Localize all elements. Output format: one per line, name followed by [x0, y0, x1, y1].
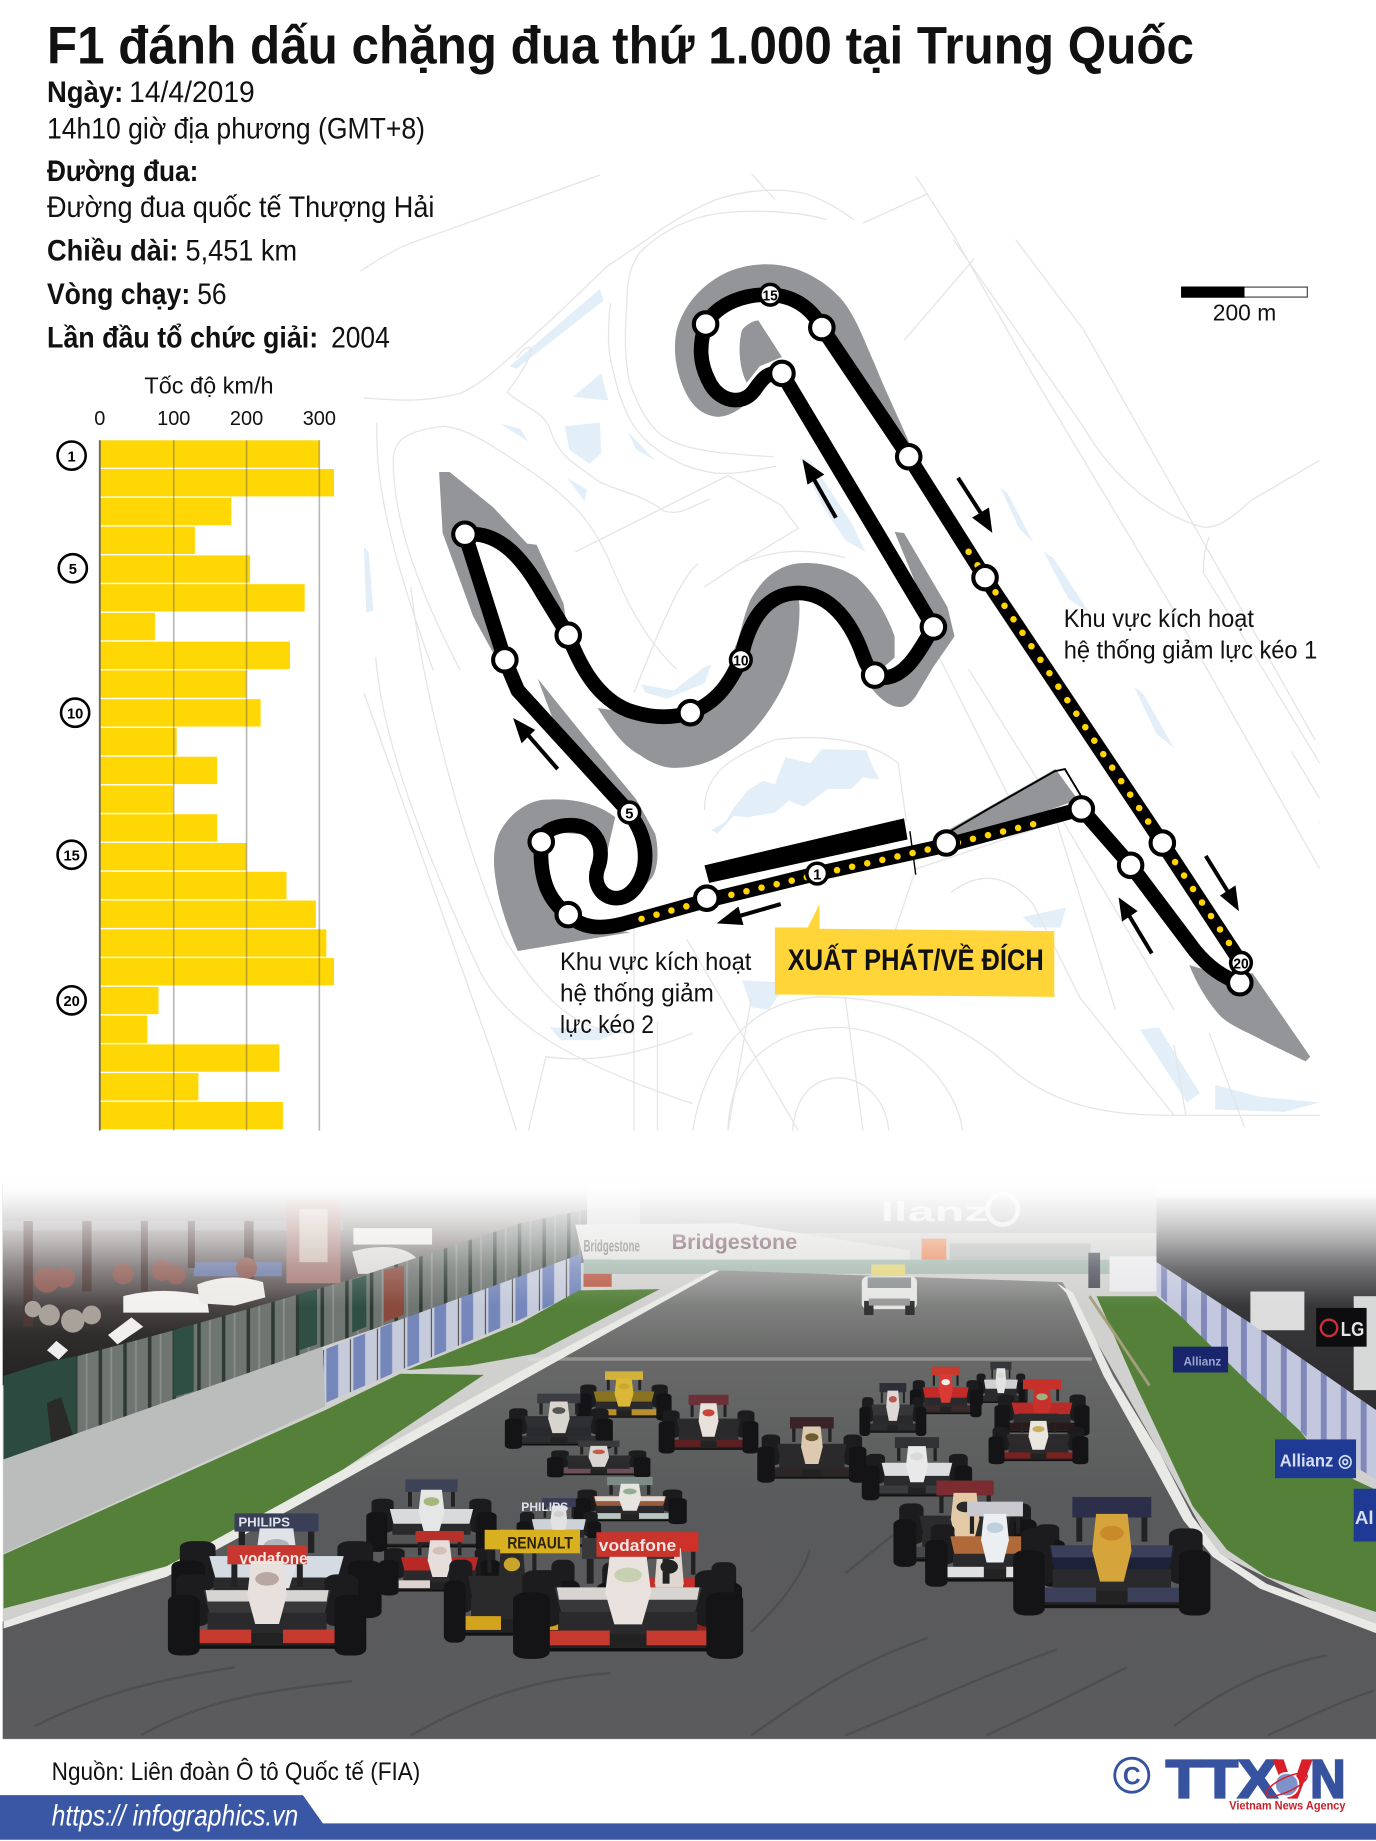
footer ribbon	[0, 1795, 1376, 1840]
skid marks	[35, 1526, 1374, 1735]
text block: race facts	[47, 76, 434, 355]
circuit track	[465, 295, 1241, 983]
corner markers: 15	[63, 849, 80, 865]
text block: race facts: Đường đua quốc tế Thượng Hải	[47, 191, 434, 224]
corner markers: 10	[67, 707, 83, 723]
left fence	[4, 1209, 587, 1459]
chart title: Tốc độ km/h	[144, 372, 274, 398]
footer ribbon: https:// infographics.vn	[52, 1800, 298, 1833]
track white lines	[4, 1270, 1376, 1633]
background signage: Bridgestone	[672, 1231, 797, 1254]
text block: race facts: Đường đua:	[47, 155, 198, 188]
text block: race facts: 56	[197, 278, 227, 311]
text block: race facts: Lần đầu tổ chức giải:	[47, 322, 318, 355]
white fade at top of photo	[0, 1178, 1376, 1307]
label: DRS zone 1: hệ thống giảm lực kéo 1	[1064, 638, 1317, 665]
text block: race facts: Ngày:	[47, 76, 123, 109]
corner markers on track: 5	[625, 806, 633, 822]
DRS zones: yellow dots	[632, 552, 1230, 945]
bar chart: speed by corner	[58, 372, 336, 1131]
corner markers: 20	[63, 994, 80, 1010]
wing lettering: vodafone	[599, 1537, 676, 1555]
corner markers on track: 15	[763, 289, 778, 305]
source line: Nguồn: Liên đoàn Ô tô Quốc tế (FIA)	[52, 1758, 420, 1786]
agency wordmark	[1166, 1750, 1345, 1810]
photo: race start	[0, 1178, 1376, 1740]
agency wordmark: N	[1310, 1750, 1345, 1810]
corner markers on track: 10	[733, 654, 748, 670]
globe	[1264, 1769, 1310, 1800]
grandstand background	[2, 1186, 587, 1385]
grass	[4, 1289, 1376, 1612]
label: DRS zone 2: Khu vực kích hoạt	[560, 949, 752, 976]
corner markers on track: 20	[1233, 957, 1249, 973]
label: DRS zone 1	[1064, 606, 1317, 665]
corner markers	[58, 441, 89, 1014]
map background: roads and water	[360, 174, 1350, 1131]
label: DRS zone 1: Khu vực kích hoạt	[1064, 606, 1254, 633]
title: F1 đánh dấu chặng đua thứ 1.000 tại Trung Quốc	[47, 16, 1194, 75]
axis tick labels: 100	[157, 408, 190, 430]
logo: TTXVN	[1115, 1750, 1346, 1812]
wing lettering: RENAULT	[507, 1535, 573, 1553]
circuit run-off areas	[439, 264, 1310, 1061]
corner markers: 1	[68, 449, 76, 465]
wing lettering	[238, 1501, 676, 1568]
right barrier and boards	[1090, 1262, 1376, 1542]
text block: race facts: 5,451 km	[186, 235, 297, 268]
text block: race facts: 14/4/2019	[129, 76, 255, 109]
wing lettering: PHILIPS	[521, 1501, 568, 1514]
corner markers on track	[453, 284, 1252, 994]
text block: race facts: Vòng chạy:	[47, 278, 190, 311]
text block: race facts: 14h10 giờ địa phương (GMT+8)	[47, 113, 425, 146]
pit building and start line	[704, 769, 1086, 883]
right barrier and boards: Allianz ◎	[1280, 1450, 1353, 1470]
axis tick labels: 200	[230, 408, 263, 430]
axis tick labels	[94, 408, 336, 430]
right wall	[1088, 1198, 1376, 1410]
bars	[100, 440, 334, 1129]
corner markers on track: 1	[813, 867, 821, 883]
right barrier and boards: Allianz	[1183, 1355, 1221, 1368]
wing lettering: PHILIPS	[238, 1514, 290, 1529]
label: DRS zone 2	[560, 949, 752, 1039]
label: DRS zone 2: hệ thống giảm	[560, 981, 714, 1008]
asphalt	[0, 1270, 1376, 1739]
direction arrows	[517, 464, 1236, 953]
left barrier and wall	[4, 1254, 612, 1553]
wing lettering: vodafone	[240, 1550, 308, 1568]
background signage: llanz	[881, 1195, 989, 1227]
right barrier and boards: Al	[1355, 1507, 1374, 1528]
right wall: LG	[1341, 1319, 1364, 1341]
logo: TTXVN: Vietnam News Agency	[1229, 1798, 1346, 1812]
axis tick labels: 300	[303, 408, 336, 430]
copyright mark: C	[1123, 1764, 1141, 1791]
axis tick labels: 0	[94, 408, 105, 430]
callout: start/finish: XUẤT PHÁT/VỀ ĐÍCH	[788, 943, 1044, 977]
agency wordmark: V	[1274, 1750, 1311, 1810]
label: DRS zone 2: lực kéo 2	[560, 1012, 654, 1039]
race cars	[168, 1362, 1210, 1659]
background signage	[575, 1223, 1156, 1274]
corner markers: 5	[69, 562, 77, 578]
agency wordmark: TTX	[1166, 1750, 1277, 1810]
text block: race facts: Chiều dài:	[47, 235, 178, 268]
text block: race facts: 2004	[331, 322, 390, 355]
scale bar	[1181, 287, 1307, 326]
safety car	[862, 1264, 917, 1315]
scale bar: 200 m	[1213, 300, 1276, 326]
background signage: Bridgestone	[584, 1238, 640, 1256]
copyright mark	[1115, 1758, 1149, 1792]
callout: start/finish	[775, 904, 1054, 997]
